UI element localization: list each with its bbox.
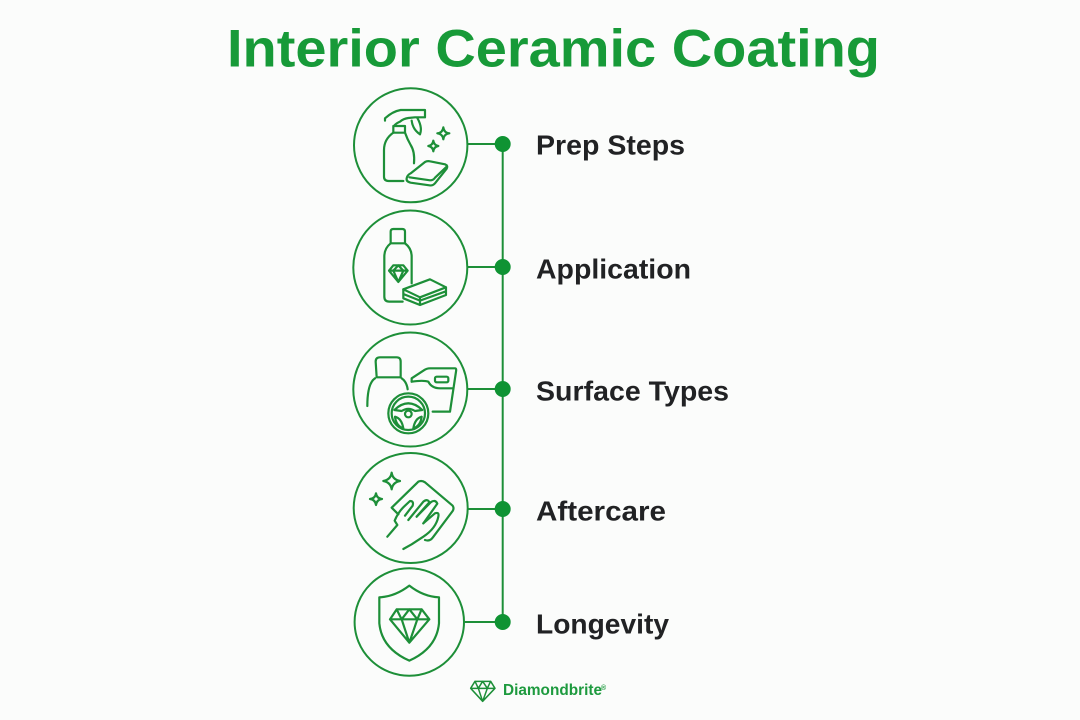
- brand logo: [471, 681, 607, 701]
- connector: [467, 388, 502, 390]
- label: Application: [536, 254, 691, 284]
- connector: [467, 266, 502, 268]
- timeline spine: [502, 144, 504, 622]
- label: Aftercare: [536, 496, 666, 526]
- step: Application: [353, 210, 691, 324]
- step: Surface Types: [353, 332, 729, 446]
- node dot: [495, 259, 511, 275]
- icon circle: hand wiping with cloth: [354, 453, 468, 563]
- icon: diamond: [471, 681, 495, 701]
- node dot: [495, 381, 511, 397]
- step: Aftercare: [354, 453, 666, 563]
- title: Interior Ceramic Coating: [227, 20, 880, 78]
- connector: [467, 508, 502, 510]
- label: Longevity: [536, 608, 670, 640]
- registered mark: ®: [601, 684, 607, 692]
- node dot: [495, 614, 511, 630]
- brand name: Diamondbrite: [503, 682, 602, 699]
- node dot: [495, 501, 511, 517]
- label: Surface Types: [536, 376, 729, 406]
- icon circle: shield with diamond: [355, 568, 464, 676]
- label: Prep Steps: [536, 130, 685, 160]
- icon circle: coating bottle and sponge: [353, 210, 467, 324]
- connector: [464, 621, 502, 623]
- connector: [467, 143, 502, 145]
- step: Longevity: [355, 568, 670, 676]
- step: Prep Steps: [354, 88, 685, 202]
- icon circle: spray bottle and cloth: [354, 88, 467, 202]
- node dot: [495, 136, 511, 152]
- icon circle: seat, door and steering wheel: [353, 332, 467, 446]
